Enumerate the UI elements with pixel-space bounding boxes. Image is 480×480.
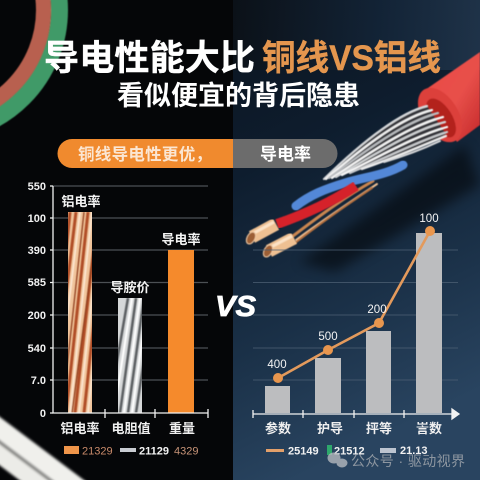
icon: chat bubbles (328, 452, 348, 468)
orange line (273, 226, 435, 383)
y axis labels: 585 (28, 277, 46, 289)
title: 导电性能大比 (44, 39, 255, 78)
red insulated wire (277, 186, 356, 224)
legend (266, 445, 428, 458)
line value labels: 500 (318, 331, 338, 343)
gray bars (265, 233, 442, 413)
bar value labels: 铝电率 (61, 194, 101, 209)
legend: 21512 (334, 446, 365, 458)
x axis labels: 抨等 (366, 421, 392, 436)
x axis labels: 重量 (169, 421, 195, 436)
line value labels: 200 (367, 304, 387, 316)
copper tip one (244, 222, 276, 246)
axes (50, 186, 208, 418)
title (44, 39, 441, 78)
orange bar (168, 250, 194, 413)
grid lines (253, 250, 458, 380)
combo chart: right (253, 213, 459, 458)
y axis labels: 200 (28, 310, 46, 322)
VS label: VS (215, 291, 257, 323)
y axis labels: 0 (40, 408, 46, 420)
copper tip two (261, 236, 294, 259)
silver bar (118, 298, 142, 412)
callout pill (57, 139, 337, 168)
line value labels: 400 (267, 359, 287, 371)
legend: 25149 (288, 446, 319, 458)
cable shadow (300, 145, 480, 272)
legend: 21.13 (400, 445, 428, 457)
blue insulated wire (296, 165, 403, 206)
legend: 21329 (82, 446, 113, 458)
y axis labels: 540 (28, 343, 46, 355)
x axis labels: 参数 (265, 421, 291, 436)
icon: stripped red cable (244, 52, 480, 272)
bar value labels: 导胺价 (110, 280, 150, 295)
x axis labels (60, 421, 195, 436)
silver strands (324, 106, 447, 180)
x axis labels: 护导 (317, 421, 343, 436)
legend: 4329 (174, 446, 198, 458)
callout pill: 铜线导电性更优， (78, 145, 212, 164)
bar value labels: 导电率 (161, 232, 201, 247)
grid lines (53, 186, 208, 380)
subtitle: 看似便宜的背后隐患 (117, 81, 360, 111)
line value labels: 100 (419, 213, 439, 225)
x axis labels: 铝电率 (60, 421, 100, 436)
x axis labels (265, 421, 442, 436)
y axis labels: 100 (28, 213, 46, 225)
copper core strands (293, 181, 377, 243)
x axis with arrow (253, 409, 459, 419)
x axis labels: 訔数 (416, 421, 442, 436)
x axis labels: 电胆值 (111, 421, 151, 436)
bar value labels (61, 194, 201, 295)
icon: white cables bottom left (0, 420, 92, 480)
y axis labels: 390 (28, 245, 46, 257)
title: 铜线VS铝线 (262, 39, 441, 78)
y axis labels (28, 181, 46, 420)
copper bar (68, 212, 92, 412)
watermark: 公众号 · 驱动视界 (351, 453, 465, 469)
callout pill: 导电率 (260, 144, 311, 164)
y axis labels: 7.0 (31, 375, 46, 387)
y axis labels: 550 (28, 181, 46, 193)
legend: 21129 (139, 446, 169, 458)
icon: green and brown cable rings (0, 0, 60, 134)
legend (64, 446, 198, 458)
red jacket (409, 52, 480, 150)
line value labels (267, 213, 439, 371)
bar chart: left (28, 181, 208, 458)
